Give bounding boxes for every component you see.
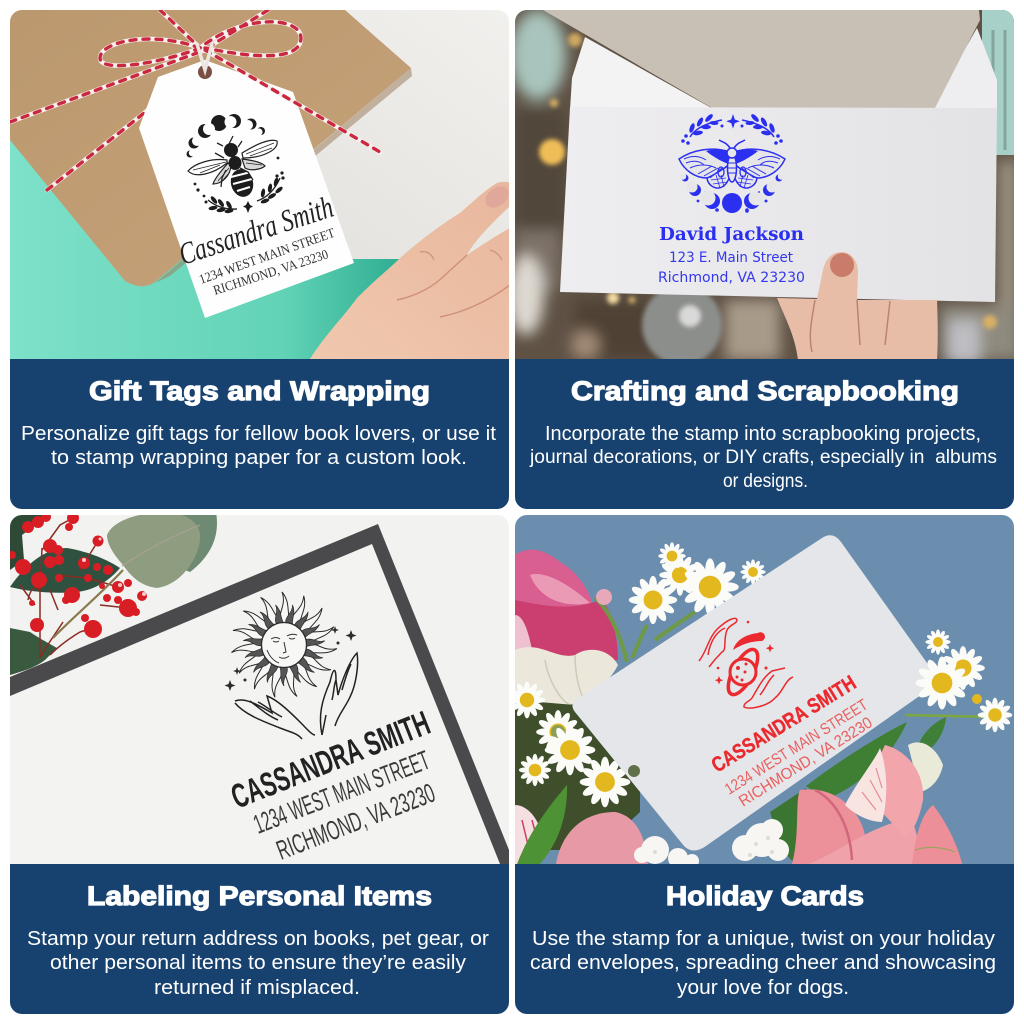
- kraft box: [10, 10, 411, 286]
- page: [10, 544, 500, 864]
- body text: [529, 423, 997, 492]
- stamp name: Cassandra Smith: [174, 189, 337, 272]
- heading: Crafting and Scrapbooking: [571, 376, 959, 406]
- hand holding tag: [310, 182, 513, 359]
- stamp: sun and hands: [224, 592, 358, 739]
- heading: Gift Tags and Wrapping: [89, 376, 430, 406]
- stamp address line 1: 1234 WEST MAIN STREET: [197, 225, 337, 287]
- kraft card: [543, 10, 980, 108]
- eucalyptus and red berries: [8, 512, 217, 675]
- body text: other personal items to ensure they’re easily: [50, 952, 466, 974]
- front daisies: [916, 629, 1012, 732]
- photo: book with stamped page: [8, 512, 509, 866]
- stamp name: CASSANDRA SMITH: [226, 704, 435, 816]
- stamp: moth and moons: [679, 113, 785, 213]
- hand: [777, 252, 938, 360]
- body text: [530, 928, 996, 999]
- panel: gift tags and wrapping: [10, 10, 513, 509]
- photo: card in bouquet: [509, 515, 1014, 868]
- stamp: bee and moons: [186, 114, 285, 214]
- body text: to stamp wrapping paper for a custom look.: [51, 447, 467, 469]
- stamp name: CASSANDRA SMITH: [708, 671, 860, 777]
- panel: crafting and scrapbooking: [508, 10, 1020, 509]
- bauble: [639, 294, 724, 359]
- bee laurel: [208, 200, 237, 209]
- body text: Use the stamp for a unique, twist on your holiday: [532, 928, 995, 950]
- panel: labeling personal items: [8, 512, 509, 1014]
- card: [572, 535, 935, 850]
- body text: [21, 423, 496, 469]
- photo: gift tag on kraft box: [10, 10, 513, 359]
- book cover: [10, 524, 509, 864]
- body text: Personalize gift tags for fellow book lovers, or use it: [21, 423, 496, 445]
- caption: labeling: [10, 864, 509, 1014]
- bee wings: [188, 140, 277, 184]
- stamp address line 2: RICHMOND, VA 23230: [736, 714, 876, 810]
- heading: Holiday Cards: [666, 881, 864, 911]
- stamp address line 1: 123 E. Main Street: [669, 250, 793, 266]
- body text: [27, 928, 489, 999]
- body text: journal decorations, or DIY crafts, especially in albums: [529, 447, 997, 468]
- body text: or designs.: [723, 471, 808, 492]
- body text: Stamp your return address on books, pet gear, or: [27, 928, 489, 950]
- panel: holiday cards: [509, 515, 1014, 1014]
- stamp address line 1: 1234 WEST MAIN STREET: [722, 696, 871, 798]
- envelope front: [560, 107, 997, 302]
- envelope back and flaps: [570, 37, 715, 110]
- stamp: planet and hands: [699, 618, 793, 708]
- heading: Labeling Personal Items: [87, 881, 432, 911]
- stamp address line 2: Richmond, VA 23230: [658, 270, 805, 286]
- stamp address line 1: 1234 WEST MAIN STREET: [249, 745, 434, 840]
- bud: [908, 742, 943, 792]
- body text: Incorporate the stamp into scrapbooking projects,: [545, 423, 981, 445]
- caption: crafting: [515, 359, 1014, 509]
- stamp address line 2: RICHMOND, VA 23230: [211, 246, 330, 298]
- body text: your love for dogs.: [677, 977, 849, 999]
- photo: envelope held in hand: [508, 10, 1020, 365]
- caption: holiday: [515, 864, 1014, 1014]
- body text: card envelopes, spreading cheer and showcasing: [530, 952, 996, 974]
- twine and bow: [10, 10, 380, 152]
- twine under tag: [47, 110, 148, 190]
- stamp name: David Jackson: [659, 225, 804, 245]
- body text: returned if misplaced.: [154, 977, 360, 999]
- green stems right: [905, 715, 992, 717]
- bouquet behind card: [509, 542, 766, 864]
- stamp address line 2: RICHMOND, VA 23230: [272, 778, 439, 866]
- foliage and pink lilies in front: [517, 722, 962, 868]
- caption: gift tags: [10, 359, 509, 509]
- gift tag: [139, 60, 354, 318]
